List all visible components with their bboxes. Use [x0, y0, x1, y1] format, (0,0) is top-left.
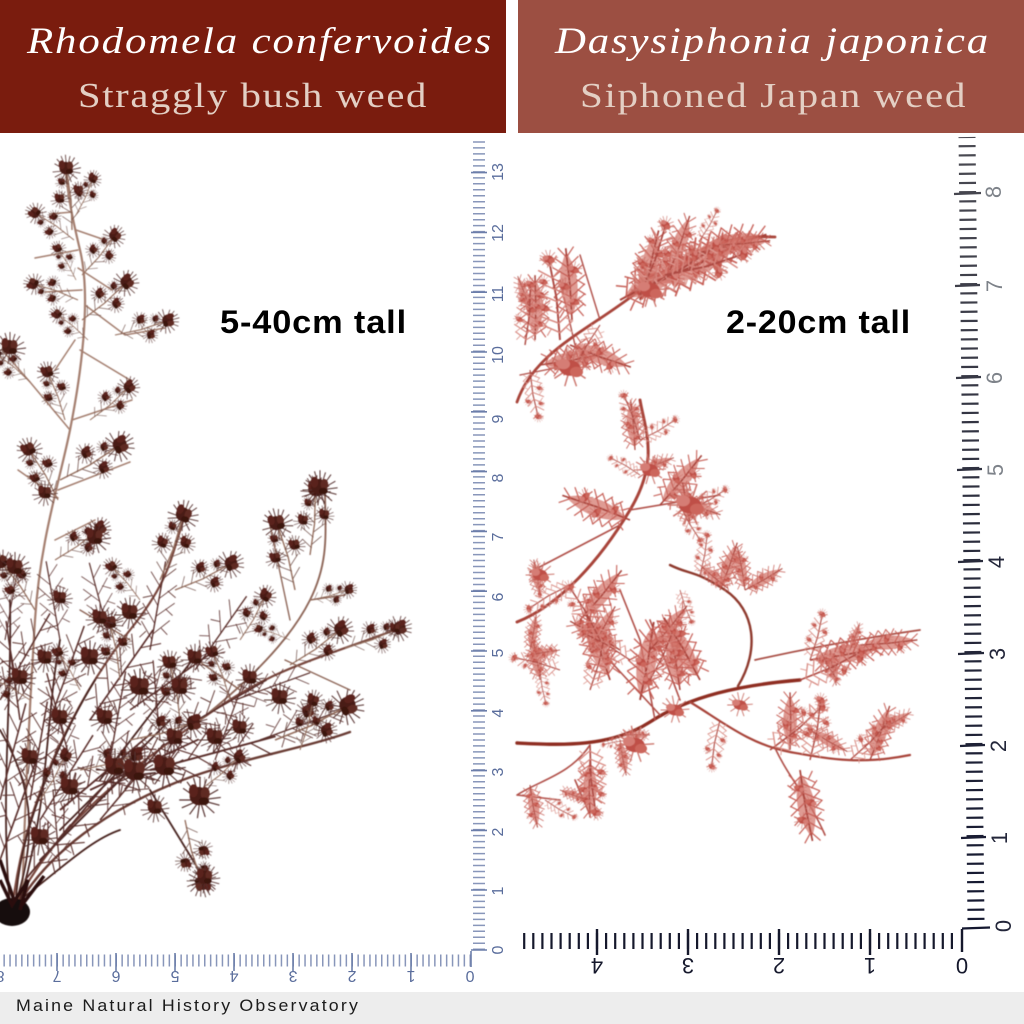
ruler: right horizontal: 4 — [591, 953, 603, 978]
ruler: right horizontal: 1 — [864, 953, 876, 978]
ruler: left horizontal: 4 — [229, 967, 238, 984]
ruler: left horizontal: 1 — [406, 967, 415, 984]
ruler: right vertical: 6 — [982, 372, 1007, 384]
ruler: right horizontal — [517, 929, 968, 978]
ruler: left vertical — [471, 137, 507, 954]
ruler: right vertical: 7 — [982, 280, 1007, 292]
ruler: right horizontal: 3 — [682, 953, 694, 978]
ruler: right vertical: 5 — [983, 464, 1008, 476]
footer credit bar — [0, 992, 1024, 1024]
credit text: Maine Natural History Observatory — [16, 997, 360, 1015]
ruler: left vertical: 2 — [490, 827, 507, 836]
ruler: right horizontal: 0 — [956, 953, 968, 978]
ruler: left vertical: 7 — [490, 532, 507, 541]
scientific name: Dasysiphonia japonica — [554, 21, 990, 62]
ruler: right vertical: 8 — [981, 186, 1006, 198]
ruler: left horizontal: 5 — [170, 967, 179, 984]
common name: Siphoned Japan weed — [580, 76, 967, 115]
size label: 5-40cm tall: 5-40cm tall — [220, 304, 407, 340]
ruler: left vertical: 6 — [490, 592, 507, 601]
feathery branchlets — [630, 223, 736, 309]
common name: Straggly bush weed — [78, 76, 428, 115]
ruler: left vertical: 11 — [490, 286, 507, 302]
ruler: left horizontal: 3 — [288, 967, 297, 984]
header panel: Rhodomela confervoides — [0, 0, 506, 133]
scientific name: Rhodomela confervoides — [26, 21, 493, 62]
ruler: left vertical: 4 — [490, 708, 507, 717]
ruler: left vertical: 12 — [490, 224, 507, 242]
ruler: left horizontal: 6 — [111, 967, 120, 984]
ruler: left vertical: 5 — [490, 648, 507, 657]
header panel: Dasysiphonia japonica — [518, 0, 1024, 133]
ruler: left horizontal: 0 — [465, 967, 474, 984]
main stems — [0, 165, 395, 905]
ruler: left horizontal — [0, 951, 474, 984]
plant specimen: Dasysiphonia japonica — [506, 203, 920, 845]
ruler: right vertical: 2 — [986, 740, 1011, 752]
ruler: left vertical: 3 — [490, 767, 507, 776]
ruler: left vertical: 0 — [490, 945, 507, 954]
ruler: left vertical: 8 — [490, 473, 507, 482]
ruler: left vertical: 1 — [490, 886, 507, 895]
dense fronds — [610, 239, 706, 318]
ruler: right vertical: 4 — [984, 556, 1009, 568]
ruler: right horizontal: 2 — [773, 953, 785, 978]
stems — [517, 237, 920, 835]
ruler: left horizontal: 2 — [347, 967, 356, 984]
tufted branchlets — [47, 153, 92, 232]
holdfast base — [0, 860, 44, 926]
plant specimen: Rhodomela confervoides — [0, 153, 418, 926]
ruler: left horizontal: 7 — [52, 967, 61, 984]
ruler: right vertical: 1 — [987, 832, 1012, 844]
fine branching — [12, 698, 65, 803]
ruler: right vertical — [954, 137, 1016, 932]
ruler: left vertical: 9 — [490, 414, 507, 423]
ruler: right vertical: 0 — [991, 920, 1016, 932]
size label: 2-20cm tall: 2-20cm tall — [726, 304, 911, 340]
ruler: left vertical: 10 — [490, 346, 507, 364]
ruler: left vertical: 13 — [490, 163, 507, 181]
ruler: right vertical: 3 — [985, 648, 1010, 660]
